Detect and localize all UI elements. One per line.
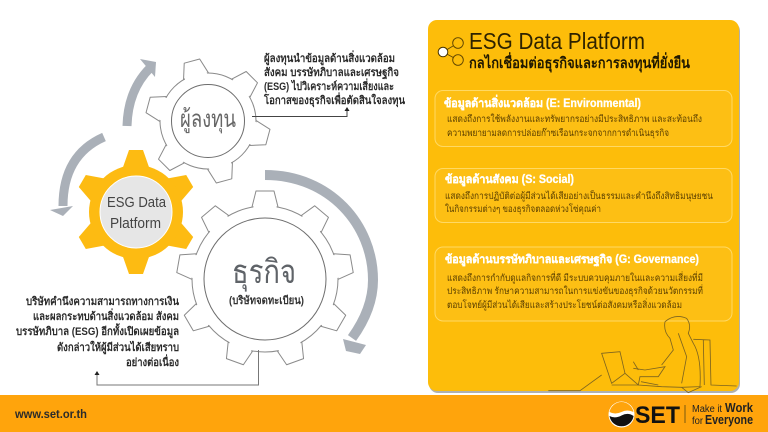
- text: investor description: โอกาสของธุรกิจเพื่อตัดสินใจลงทุน: [263, 92, 405, 108]
- card: environmental: แสดงถึงการใช้พลังงานและทรัพยากรอย่างมีประสิทธิภาพ และสะท้อนถึง: [447, 113, 702, 125]
- gear: investor: [145, 58, 271, 184]
- footer bar: [0, 395, 768, 432]
- text: business description: และผลกระทบด้านสิ่งแวดล้อม สังคม: [33, 308, 179, 323]
- panel title: ESG Data Platform: [469, 28, 645, 54]
- panel: ESG Data Platform: [428, 20, 740, 393]
- text: investor description: (ESG) ไปวิเคราะห์ความเสี่ยงและ: [264, 78, 394, 93]
- card: social: ในกิจกรรมต่างๆ ของธุรกิจตลอดห่วงโซ่คุณค่า: [445, 203, 601, 215]
- gear label: ESG Data Platform: [107, 194, 167, 232]
- panel subtitle: กลไกเชื่อมต่อธุรกิจและการลงทุนที่ยั่งยืน: [469, 52, 691, 73]
- card: governance: [435, 247, 732, 321]
- card: governance: ข้อมูลด้านบรรษัทภิบาลและเศรษฐกิจ (G: Governance): [445, 253, 699, 267]
- gear: ESG Data Platform: [75, 150, 197, 274]
- gear label: business: ธุรกิจ: [232, 253, 296, 292]
- arrow: investor to platform: [50, 137, 104, 216]
- gear label: ESG Data Platform: Platform: [110, 215, 161, 232]
- text: investor description: ผู้ลงทุนนำข้อมูลด้านสิ่งแวดล้อม: [264, 50, 395, 66]
- gear: business: [176, 191, 354, 366]
- SET logo: Work: [725, 401, 753, 415]
- card: governance: ตอบโจทย์ผู้มีส่วนได้เสียและสร้างประโยชน์ต่อสังคมหรือสิ่งแวดล้อม: [447, 298, 682, 311]
- card: governance: แสดงถึงการกำกับดูแลกิจการที่ดี มีระบบควบคุมภายในและความเสี่ยงที่มี: [447, 271, 703, 284]
- icon: connected circles: [438, 38, 463, 65]
- card: environmental: ความพยายามลดการปล่อยก๊าซเรือนกระจกจากการดำเนินธุรกิจ: [447, 127, 669, 139]
- SET logo: for: [692, 416, 704, 427]
- gear label: investor: ผู้ลงทุน: [180, 106, 236, 134]
- text: business description: บรรษัทภิบาล (ESG) อีกทั้งเปิดเผยข้อมูล: [16, 323, 179, 339]
- card: environmental: ข้อมูลด้านสิ่งแวดล้อม (E: Environmental): [444, 94, 641, 111]
- card: governance: ประสิทธิภาพ รักษาความสามารถในการแข่งขันของธุรกิจด้วยนวัตกรรมที่: [447, 284, 703, 297]
- text: business description: บริษัทคำนึงความสามารถทางการเงิน: [26, 295, 179, 308]
- text: business description: ดังกล่าวให้ผู้มีส่วนได้เสียทราบ: [57, 340, 179, 355]
- gear sublabel: listed company: (บริษัทจดทะเบียน): [229, 294, 304, 307]
- connector arrow: business gear to description: [94, 350, 258, 385]
- connector arrow: investor gear to description: [252, 107, 350, 116]
- gear label: ESG Data Platform: ESG Data: [107, 194, 167, 211]
- card: social: ข้อมูลด้านสังคม (S: Social): [445, 173, 574, 187]
- arrow: platform to business: [265, 175, 373, 354]
- SET logo: [608, 401, 753, 429]
- card: environmental: [435, 90, 732, 146]
- illustration: person at laptop: [548, 316, 737, 393]
- text: investor description: [263, 50, 405, 108]
- card: social: แสดงถึงการปฏิบัติต่อผู้มีส่วนได้เสียอย่างเป็นธรรมและคำนึงถึงสิทธิมนุษยชน: [445, 189, 713, 202]
- text: business description: อย่างต่อเนื่อง: [126, 354, 179, 369]
- text: investor description: สังคม บรรษัทภิบาลและเศรษฐกิจ: [264, 66, 399, 80]
- card: social: [435, 168, 732, 222]
- text: business description: [16, 295, 179, 369]
- SET logo: SET: [635, 402, 680, 429]
- website url: www.set.or.th: [14, 407, 87, 421]
- arrow: business to investor: [127, 59, 156, 126]
- SET logo: Make it: [692, 404, 722, 415]
- SET logo: Everyone: [705, 413, 753, 427]
